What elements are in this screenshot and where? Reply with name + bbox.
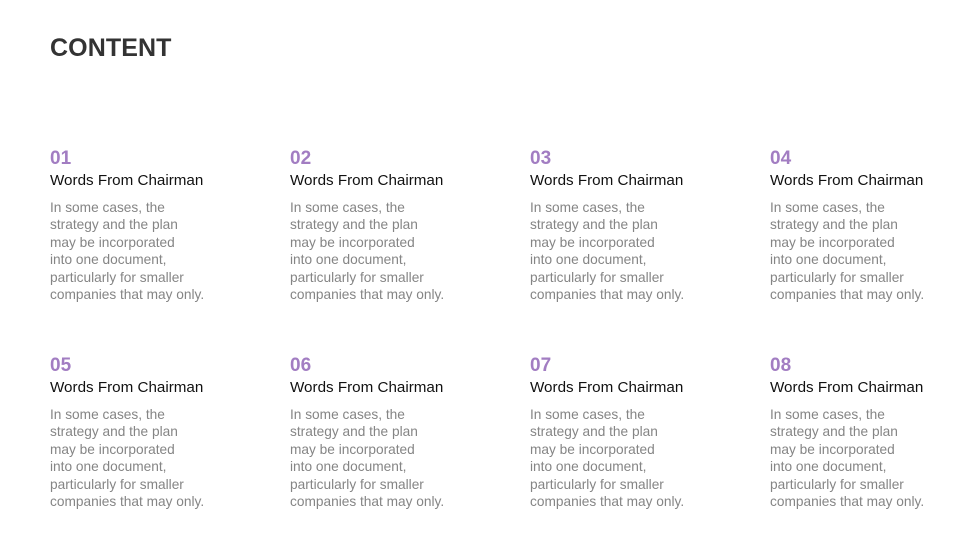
- item 07: strategy and the plan: [530, 424, 658, 439]
- item 04: 04: [770, 148, 791, 169]
- item 05: Words From Chairman: [50, 379, 203, 396]
- item 06: companies that may only.: [290, 494, 444, 509]
- item 05: may be incorporated: [50, 442, 175, 457]
- item 06: [290, 355, 444, 509]
- item 06: strategy and the plan: [290, 424, 418, 439]
- item 01: [50, 148, 204, 302]
- item 02: companies that may only.: [290, 287, 444, 302]
- item 01: strategy and the plan: [50, 217, 178, 232]
- item 01: Words From Chairman: [50, 172, 203, 189]
- item 08: 08: [770, 355, 791, 376]
- item 04: In some cases, the: [770, 200, 885, 215]
- item 01: companies that may only.: [50, 287, 204, 302]
- item 08: Words From Chairman: [770, 379, 923, 396]
- item 03: [530, 148, 684, 302]
- item 01: may be incorporated: [50, 235, 175, 250]
- item 07: into one document,: [530, 459, 646, 474]
- item 06: particularly for smaller: [290, 477, 424, 492]
- title: CONTENT: [50, 34, 172, 62]
- item 02: may be incorporated: [290, 235, 415, 250]
- item 03: strategy and the plan: [530, 217, 658, 232]
- item 02: Words From Chairman: [290, 172, 443, 189]
- item 05: companies that may only.: [50, 494, 204, 509]
- item 05: into one document,: [50, 459, 166, 474]
- item 06: 06: [290, 355, 311, 376]
- item 03: into one document,: [530, 252, 646, 267]
- item 04: companies that may only.: [770, 287, 924, 302]
- item 06: In some cases, the: [290, 407, 405, 422]
- item 04: strategy and the plan: [770, 217, 898, 232]
- item 07: [530, 355, 684, 509]
- item 05: particularly for smaller: [50, 477, 184, 492]
- item 02: In some cases, the: [290, 200, 405, 215]
- item 06: Words From Chairman: [290, 379, 443, 396]
- item 01: particularly for smaller: [50, 270, 184, 285]
- item 01: In some cases, the: [50, 200, 165, 215]
- item 02: into one document,: [290, 252, 406, 267]
- item 04: Words From Chairman: [770, 172, 923, 189]
- item 08: strategy and the plan: [770, 424, 898, 439]
- item 02: particularly for smaller: [290, 270, 424, 285]
- item 07: particularly for smaller: [530, 477, 664, 492]
- item 04: may be incorporated: [770, 235, 895, 250]
- item 04: [770, 148, 924, 302]
- item 08: particularly for smaller: [770, 477, 904, 492]
- item 02: 02: [290, 148, 311, 169]
- item 02: [290, 148, 444, 302]
- item 07: companies that may only.: [530, 494, 684, 509]
- item 06: may be incorporated: [290, 442, 415, 457]
- item 08: may be incorporated: [770, 442, 895, 457]
- item 07: 07: [530, 355, 551, 376]
- item 04: into one document,: [770, 252, 886, 267]
- item 03: Words From Chairman: [530, 172, 683, 189]
- item 06: into one document,: [290, 459, 406, 474]
- item 07: Words From Chairman: [530, 379, 683, 396]
- item 01: 01: [50, 148, 71, 169]
- item 03: particularly for smaller: [530, 270, 664, 285]
- item 07: In some cases, the: [530, 407, 645, 422]
- item 03: In some cases, the: [530, 200, 645, 215]
- item 08: into one document,: [770, 459, 886, 474]
- item 08: In some cases, the: [770, 407, 885, 422]
- item 05: 05: [50, 355, 71, 376]
- item 05: strategy and the plan: [50, 424, 178, 439]
- item 01: into one document,: [50, 252, 166, 267]
- item 08: companies that may only.: [770, 494, 924, 509]
- item 02: strategy and the plan: [290, 217, 418, 232]
- item 03: may be incorporated: [530, 235, 655, 250]
- item 05: In some cases, the: [50, 407, 165, 422]
- item 07: may be incorporated: [530, 442, 655, 457]
- item 08: [770, 355, 924, 509]
- item 03: 03: [530, 148, 551, 169]
- item 05: [50, 355, 204, 509]
- item 04: particularly for smaller: [770, 270, 904, 285]
- item 03: companies that may only.: [530, 287, 684, 302]
